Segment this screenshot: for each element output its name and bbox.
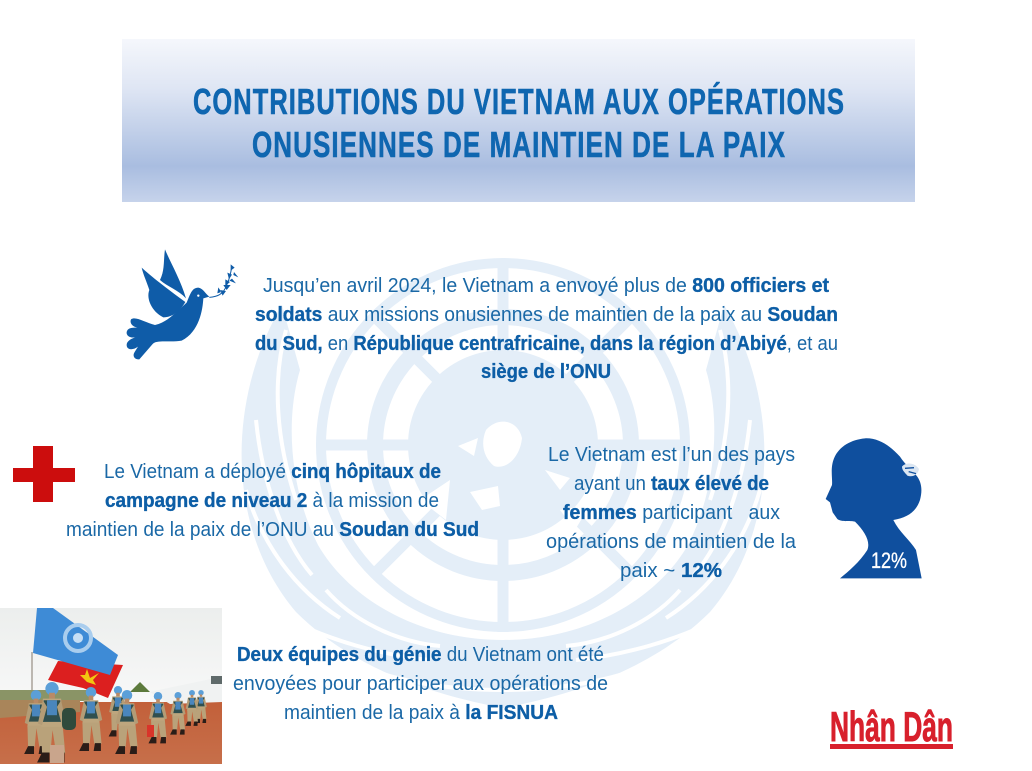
text block: officers and soldiers: soldats aux missions onusiennes de maintien de la paix au Soudan: [255, 304, 838, 326]
text block: officers and soldiers: siège de l’ONU: [481, 361, 611, 383]
text block: women participation: femmes participant aux: [563, 502, 780, 524]
title: ONUSIENNES DE MAINTIEN DE LA PAIX: [252, 124, 786, 165]
background emblem: United Nations: [242, 263, 764, 708]
text block: field hospitals: maintien de la paix de l’ONU au Soudan du Sud: [66, 519, 479, 541]
text block: officers and soldiers: [255, 275, 838, 383]
logo: Nhân Dân: Nhân Dân: [830, 703, 953, 750]
icon: peace dove: [127, 249, 238, 359]
text block: field hospitals: [66, 461, 479, 541]
text block: officers and soldiers: du Sud, en République centrafricaine, dans la région d’Abiyé, et au: [255, 333, 838, 355]
title banner: [122, 39, 915, 202]
text block: engineering teams: [233, 644, 608, 724]
text block: women participation: ayant un taux élevé de: [574, 473, 769, 495]
text block: women participation: paix ~ 12%: [620, 560, 722, 582]
text block: women participation: Le Vietnam est l’un des pays: [548, 444, 795, 466]
text block: women participation: [546, 444, 797, 582]
text block: field hospitals: campagne de niveau 2 à la mission de: [105, 490, 439, 512]
logo: Nhân Dân: [830, 703, 953, 750]
text block: engineering teams: maintien de la paix à la FISNUA: [284, 702, 558, 724]
text block: field hospitals: Le Vietnam a déployé cinq hôpitaux de: [104, 461, 441, 483]
photo: Vietnamese peacekeepers with flags: [0, 608, 222, 764]
text block: engineering teams: envoyées pour participer aux opérations de: [233, 673, 608, 695]
icon: woman silhouette 12%: [826, 438, 922, 578]
title: [193, 81, 845, 165]
text block: women participation: opérations de maintien de la: [546, 531, 797, 553]
text block: officers and soldiers: Jusqu’en avril 2024, le Vietnam a envoyé plus de 800 officiers et: [263, 275, 829, 297]
text block: engineering teams: Deux équipes du génie du Vietnam ont été: [237, 644, 604, 666]
icon: woman silhouette 12%: 12%: [871, 548, 907, 573]
icon: red cross: [13, 446, 75, 502]
